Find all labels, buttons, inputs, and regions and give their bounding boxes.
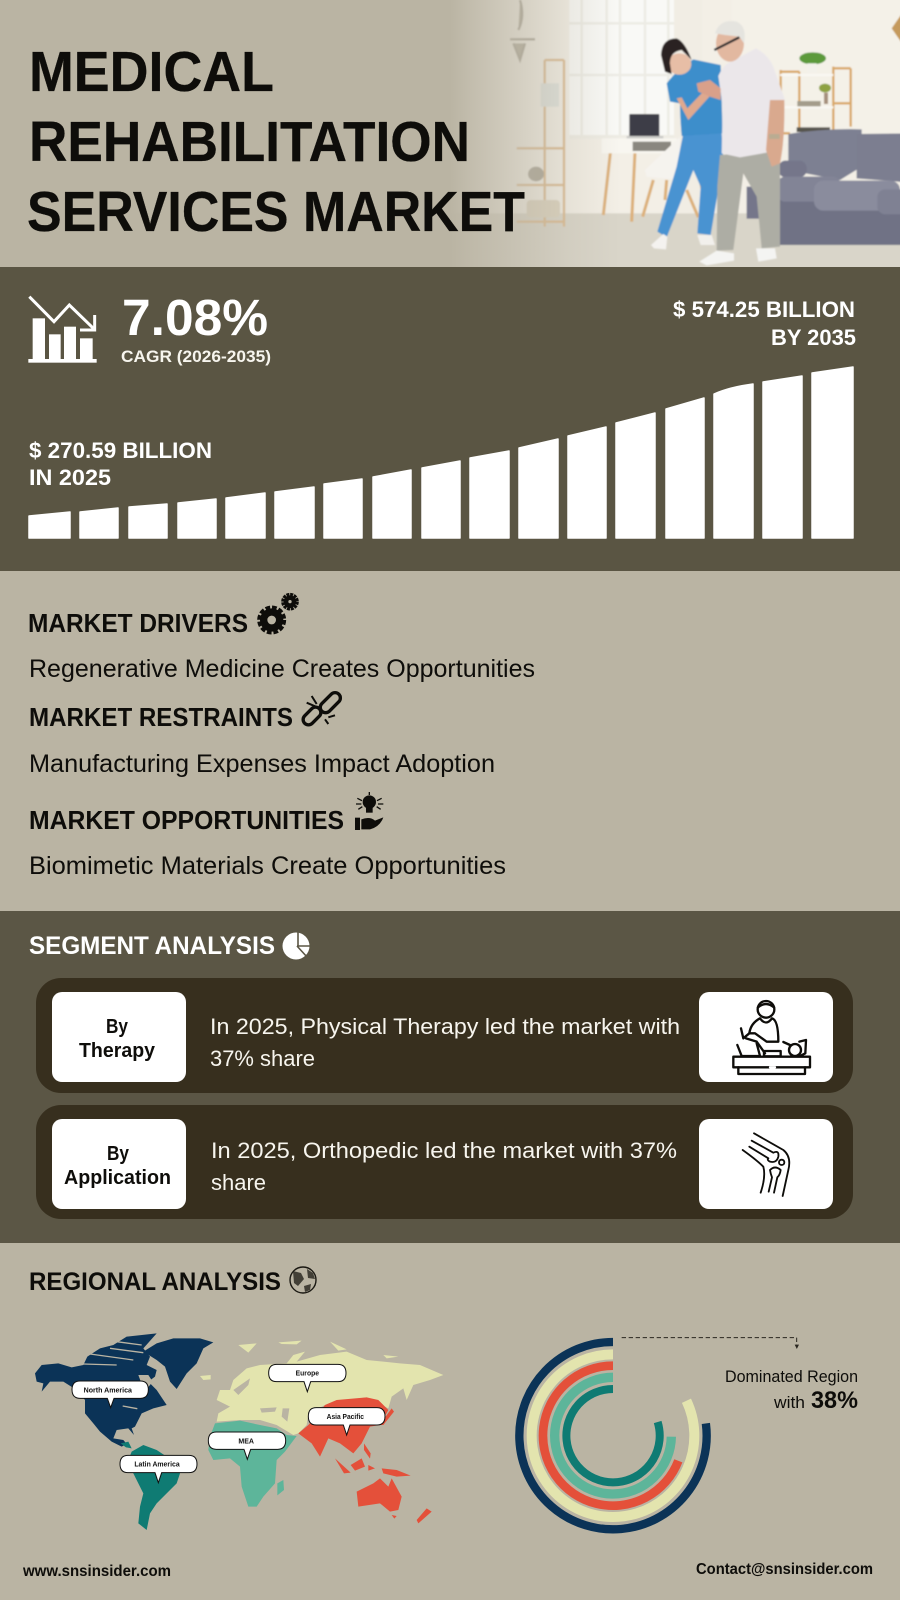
photo fade overlay <box>450 0 620 267</box>
label box: by application <box>52 1119 186 1209</box>
segment analysis heading: SEGMENT ANALYSIS <box>29 932 275 960</box>
icon: pie chart <box>282 932 311 960</box>
callout: Asia Pacific <box>308 1408 385 1435</box>
icon: bar chart with trend arrow <box>28 296 97 363</box>
callout: Europe <box>269 1364 346 1392</box>
header photo: nurse helping elderly patient walk <box>466 0 900 267</box>
label box: by therapy <box>52 992 186 1082</box>
opportunities text: Biomimetic Materials Create Opportunities <box>29 852 506 880</box>
callout: Europe: Europe <box>296 1371 319 1378</box>
title: SERVICES MARKET <box>27 180 525 244</box>
application description: share <box>211 1170 266 1195</box>
card: by therapy <box>36 978 853 1093</box>
icon: gears <box>259 594 297 633</box>
icon: idea in hand <box>355 792 383 830</box>
callout: Latin America: Latin America <box>134 1462 180 1469</box>
title: REHABILITATION <box>29 110 470 174</box>
restraints text: Manufacturing Expenses Impact Adoption <box>29 750 495 778</box>
regional analysis heading: REGIONAL ANALYSIS <box>29 1268 281 1296</box>
icon: globe <box>290 1267 316 1293</box>
panel: segment analysis <box>0 911 900 1243</box>
application description <box>211 1138 677 1195</box>
region: Middle East and Africa <box>208 1421 297 1507</box>
world map <box>35 1333 443 1530</box>
therapy description: In 2025, Physical Therapy led the market with <box>210 1014 680 1039</box>
end value label: $ 574.25 BILLION <box>673 297 855 322</box>
end value label: BY 2035 <box>771 325 856 350</box>
region: Latin America <box>121 1442 180 1530</box>
panel: market drivers, restraints, opportunities <box>28 594 535 880</box>
callout: North America <box>72 1381 148 1408</box>
dominated region callout: with <box>773 1393 805 1412</box>
market drivers heading: MARKET DRIVERS <box>28 608 248 638</box>
application description: In 2025, Orthopedic led the market with 37% <box>211 1138 677 1163</box>
callout: Latin America <box>120 1455 197 1483</box>
callout: North America: North America <box>84 1387 132 1394</box>
therapy description <box>210 1014 680 1071</box>
end value label <box>673 297 856 350</box>
callout: MEA <box>208 1432 286 1459</box>
region: Europe and northern Asia <box>200 1341 443 1435</box>
icon: knee joint <box>699 1119 833 1209</box>
CAGR value: 7.08% <box>122 289 268 346</box>
panel: market size and growth <box>0 267 900 571</box>
radial bar chart: regional shares <box>519 1338 799 1529</box>
title <box>27 40 525 244</box>
footer contact: Contact@snsinsider.com <box>696 1561 873 1578</box>
footer website: www.snsinsider.com <box>22 1563 171 1580</box>
title: MEDICAL <box>29 40 274 104</box>
start value label: $ 270.59 BILLION <box>29 438 212 463</box>
therapy description: 37% share <box>210 1046 315 1071</box>
dominated region callout <box>725 1367 858 1414</box>
region: North America <box>35 1333 213 1447</box>
dashed leader arrow <box>622 1338 799 1349</box>
dominated region callout: Dominated Region <box>725 1367 858 1386</box>
label box: by application: By <box>107 1143 130 1165</box>
market restraints heading: MARKET RESTRAINTS <box>29 702 293 732</box>
icon: physiotherapist with patient <box>699 992 833 1082</box>
label box: by therapy: By <box>106 1016 129 1038</box>
region: Asia Pacific <box>298 1397 432 1523</box>
start value label <box>29 438 212 490</box>
label box: by therapy: Therapy <box>79 1040 156 1062</box>
drivers text: Regenerative Medicine Creates Opportunities <box>29 655 535 683</box>
callout: MEA: MEA <box>238 1438 254 1445</box>
bar chart: growth 2025 to 2035 <box>29 367 853 538</box>
dominated region callout: 38% <box>811 1387 858 1414</box>
callout: Asia Pacific: Asia Pacific <box>327 1414 364 1421</box>
CAGR label: CAGR (2026-2035) <box>121 347 271 366</box>
start value label: IN 2025 <box>29 465 111 490</box>
label box: by application: Application <box>64 1167 171 1189</box>
card: by application <box>36 1105 853 1219</box>
icon: broken chain <box>301 690 343 727</box>
market opportunities heading: MARKET OPPORTUNITIES <box>29 805 344 835</box>
